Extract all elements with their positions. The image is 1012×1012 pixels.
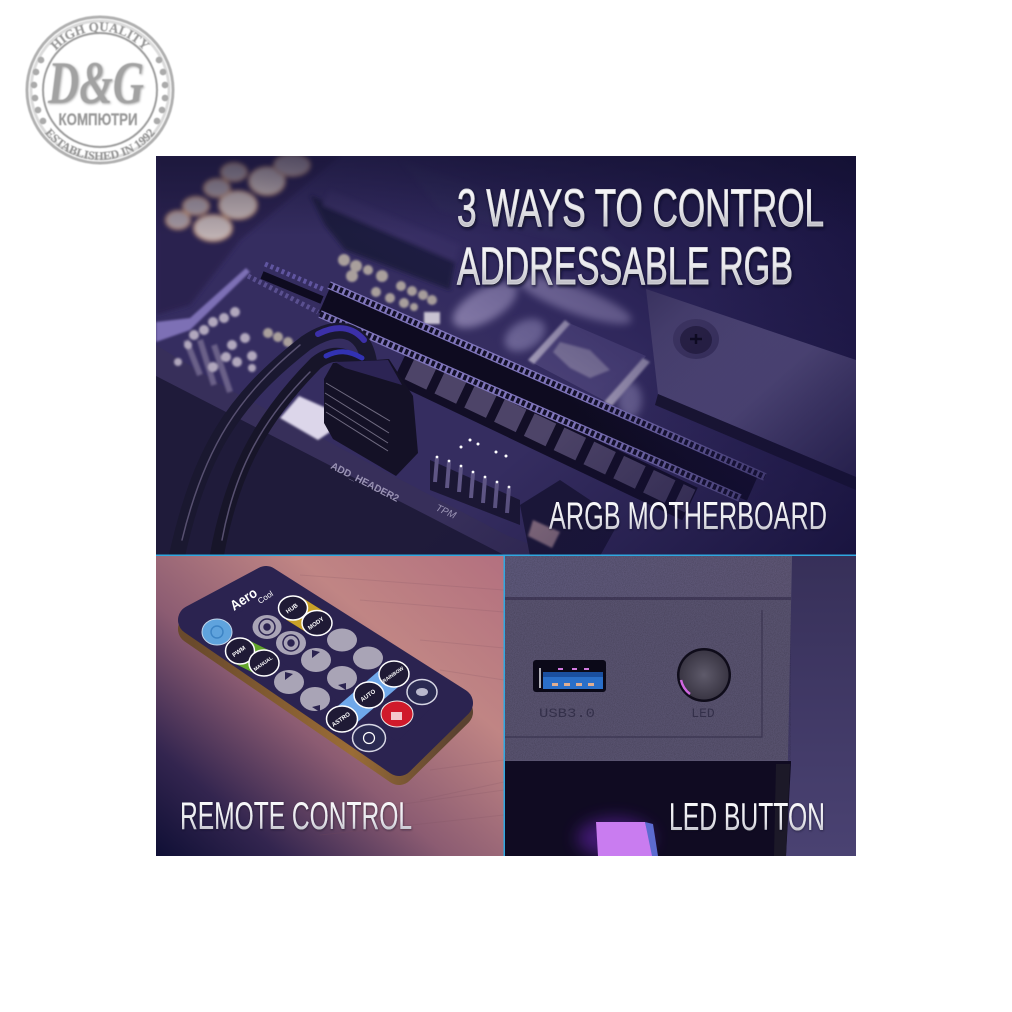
logo: D&G seal: ESTABLISHED IN 1992: [44, 128, 156, 161]
ARGB connector: [324, 359, 418, 476]
LED button icon: [677, 648, 731, 702]
remote: [193, 581, 458, 770]
remote button labels: PWM: [232, 646, 247, 659]
texture: [505, 556, 791, 760]
upper expansion slots: [312, 196, 456, 291]
remote button labels: AUTO: [360, 689, 377, 703]
logo: D&G seal: КОМПЮТРИ: [58, 110, 138, 129]
grey buttons: [252, 615, 383, 711]
VRM chip: [528, 320, 650, 406]
arrows: [285, 650, 346, 712]
remote button labels: RAINBOW: [382, 666, 405, 685]
lower black window: [505, 761, 791, 856]
purple light glow: [577, 818, 653, 858]
window side strip: [774, 764, 790, 856]
wood grain: [300, 575, 504, 835]
bright diagonal strip: [156, 268, 250, 342]
panel: LED button: [505, 556, 856, 858]
label: remote control: REMOTE CONTROL: [180, 795, 412, 838]
remote button labels: [232, 603, 405, 729]
case upper bevel: [505, 556, 791, 597]
embossed frame: [505, 610, 762, 737]
USB label: USB3.0: [539, 706, 595, 721]
remote side edge: [193, 590, 458, 770]
logo: D&G seal: D&G: [47, 50, 144, 116]
colour grade right: [280, 156, 856, 479]
panel: ARGB motherboard: [156, 154, 856, 560]
dark buttons: [226, 596, 409, 732]
slot bay shadow: [400, 366, 690, 504]
logo: D&G seal: [25, 15, 175, 165]
USB 3.0 port: [533, 660, 606, 692]
fan icons: [259, 619, 299, 651]
heatsink shadow edge: [655, 394, 856, 490]
motherboard photo base: [156, 156, 856, 555]
right strip: [786, 556, 856, 856]
label: ARGB motherboard: ARGB MOTHERBOARD: [549, 495, 827, 538]
colour grade top-left: [156, 156, 844, 228]
blurred components: [263, 254, 440, 347]
bevel line: [505, 597, 791, 600]
LED label: LED: [691, 706, 715, 721]
colour grade bottom-right: [508, 323, 856, 554]
AeroCool logo: Aero: [227, 584, 260, 614]
white connector: [280, 396, 330, 440]
panel: remote control: [156, 556, 504, 856]
TPM silkscreen: TPM: [434, 503, 458, 522]
colour band: yellow: [293, 608, 317, 623]
cables: [176, 328, 369, 560]
wood background: [156, 556, 504, 856]
remote button labels: ASTRO: [331, 712, 352, 729]
heading line 2: ADDRESSABLE RGB: [457, 237, 793, 296]
PCIe slot long: [248, 264, 765, 498]
mid-board components: [446, 267, 642, 418]
purple light bar: [596, 822, 654, 856]
blue light edge: [645, 822, 658, 856]
slot squares: [410, 368, 690, 501]
heading: [456, 188, 825, 289]
remote face: [193, 581, 458, 761]
power button: [202, 619, 232, 645]
heatsink screw: [673, 319, 719, 359]
TPM pin header: [430, 438, 520, 525]
label: LED button: LED BUTTON: [669, 796, 825, 839]
heatsink: [646, 289, 856, 477]
AeroCool logo: Cool: [256, 589, 275, 606]
header silkscreen: ADD_HEADER2: [329, 461, 401, 505]
divider lines: [156, 554, 856, 856]
logo: D&G seal: HIGH QUALITY: [50, 22, 150, 51]
remote button labels: MANUAL: [253, 656, 274, 673]
heading line 1: 3 WAYS TO CONTROL: [457, 179, 824, 238]
colour band: blue: [342, 674, 394, 719]
lower-right board traces: [520, 480, 620, 556]
case front: [505, 556, 856, 856]
top-left dark band: [156, 160, 318, 314]
remote button labels: HUB: [285, 603, 300, 615]
capacitors: [166, 154, 310, 241]
left pin header: [174, 307, 257, 392]
remote button labels: MODY: [307, 617, 326, 632]
colour band: green: [240, 651, 264, 663]
board edge strip: [156, 372, 516, 554]
brightness and lock buttons: [352, 680, 437, 752]
table surface: [156, 372, 530, 556]
